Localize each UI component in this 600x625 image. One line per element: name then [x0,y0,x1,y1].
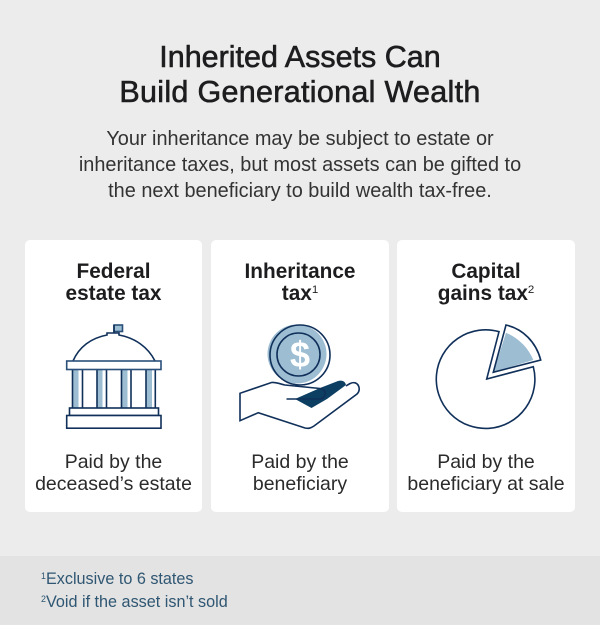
description: inheritance tax [251,451,349,495]
heading: inheritance tax [245,260,355,305]
title: Inherited Assets Can [159,40,441,74]
description: federal estate tax: deceased’s estate [35,473,192,495]
description: inheritance tax: Paid by the [251,451,349,473]
panel: capital gains tax [397,240,575,512]
description: federal estate tax [35,451,192,495]
heading: capital gains tax [438,260,534,305]
icon: hand holding coin [240,324,359,428]
title [119,40,481,109]
heading: federal estate tax [66,260,162,305]
intro text: the next beneficiary to build wealth tax-free. [108,180,492,202]
heading: capital gains tax: gains tax2 [438,282,534,305]
intro text [79,128,521,202]
footnote 1: 1Exclusive to 6 states [41,570,194,588]
footnote band [0,556,600,625]
description: federal estate tax: Paid by the [65,451,162,473]
intro text: Your inheritance may be subject to estate or [106,128,494,150]
intro text: inheritance taxes, but most assets can be gifted to [79,154,521,176]
description: capital gains tax: beneficiary at sale [407,473,565,495]
title: Build Generational Wealth [119,75,481,109]
footnote 2: 2Void if the asset isn’t sold [41,593,228,611]
description: inheritance tax: beneficiary [253,473,347,495]
description: capital gains tax: Paid by the [437,451,535,473]
heading: federal estate tax: Federal [76,260,150,283]
panel: inheritance tax [211,240,389,512]
dollar sign: $ [290,334,310,375]
heading: inheritance tax: Inheritance [245,260,355,283]
heading: inheritance tax: tax1 [282,282,318,305]
icon: government building [67,325,161,428]
panel: federal estate tax [25,240,202,512]
icon: pie chart [436,325,541,428]
description: capital gains tax [407,451,565,495]
heading: federal estate tax: estate tax [66,282,161,305]
heading: capital gains tax: Capital [451,260,521,283]
